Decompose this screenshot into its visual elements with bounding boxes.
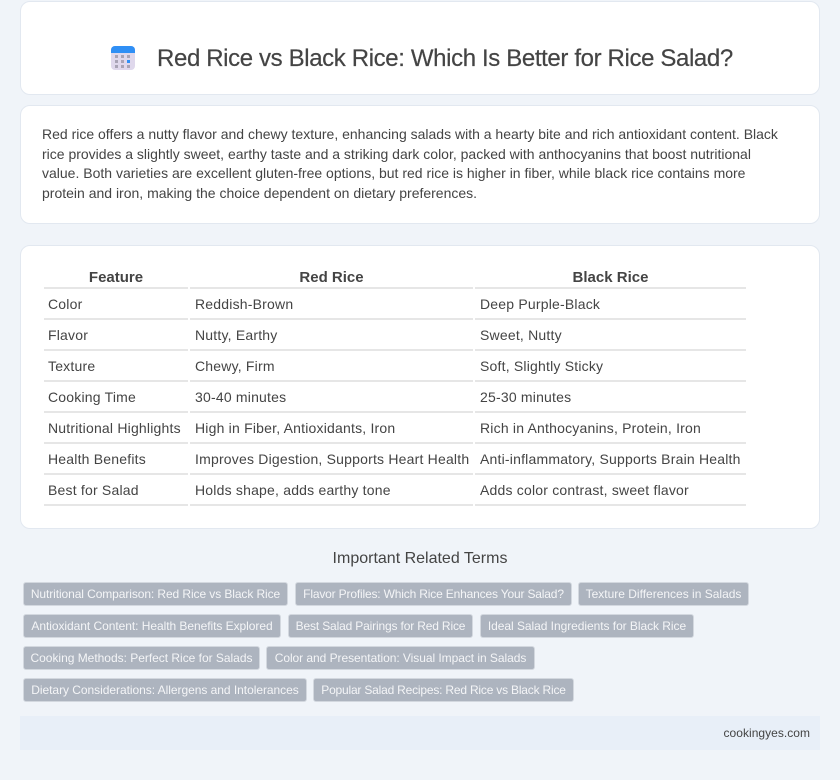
text: Deep Purple-Black [480, 296, 600, 312]
intro text: value. Both varieties are excellent gluten-free options, but red rice is higher in fiber, while black rice contains more [42, 165, 745, 181]
text: Health Benefits [48, 451, 146, 467]
related term tags: Ideal Salad Ingredients for Black Rice [488, 619, 686, 633]
text: Chewy, Firm [195, 358, 275, 374]
related term tags: Dietary Considerations: Allergens and Intolerances [31, 683, 299, 697]
related term tags: Cooking Methods: Perfect Rice for Salads [30, 651, 252, 665]
header panel [20, 1, 820, 95]
header: Black Rice: Black Rice [573, 269, 648, 286]
related term tags: Nutritional Comparison: Red Rice vs Black Rice [31, 587, 280, 601]
text: Rich in Anthocyanins, Protein, Iron [480, 420, 701, 436]
text: Adds color contrast, sweet flavor [480, 482, 689, 498]
text: Color [48, 296, 82, 312]
header: Feature [44, 266, 188, 289]
text: Texture [48, 358, 95, 374]
header: Red Rice: Red Rice [299, 269, 364, 286]
text: Nutritional Highlights [48, 420, 181, 436]
intro text: Red rice offers a nutty flavor and chewy texture, enhancing salads with a hearty bite and rich antioxidant content. Black [42, 126, 778, 142]
header: Feature: Feature [89, 269, 143, 286]
panel: comparison table [20, 245, 820, 529]
related term tags: Antioxidant Content: Health Benefits Explored [31, 619, 273, 633]
related term tags [23, 582, 749, 702]
icon: calendar [111, 46, 135, 70]
header: Black Rice [475, 266, 746, 289]
related term tags: Color and Presentation: Visual Impact in Salads [275, 651, 526, 665]
intro text: rice provides a slightly sweet, earthy taste and a striking dark color, packed with anthocyanins that boost nutritional [42, 146, 751, 162]
text: High in Fiber, Antioxidants, Iron [195, 420, 395, 436]
text: Improves Digestion, Supports Heart Health [195, 451, 469, 467]
header: Red Rice [190, 266, 473, 289]
text: Flavor [48, 327, 88, 343]
text: Anti-inflammatory, Supports Brain Health [480, 451, 741, 467]
intro text: protein and iron, making the choice dependent on dietary preferences. [42, 184, 477, 200]
text: Sweet, Nutty [480, 327, 562, 343]
intro text [42, 126, 778, 201]
footer source: cookingyes.com [724, 726, 810, 740]
text: Reddish-Brown [195, 296, 293, 312]
comparison table headers [44, 269, 746, 289]
panel: introduction [20, 105, 820, 224]
related term tags: Texture Differences in Salads [586, 587, 741, 601]
text: Nutty, Earthy [195, 327, 277, 343]
related terms heading: Important Related Terms [333, 550, 507, 567]
related term tags: Flavor Profiles: Which Rice Enhances Your Salad? [303, 587, 564, 601]
title: Red Rice vs Black Rice: Which Is Better for Rice Salad? [157, 45, 733, 72]
footer bar [20, 716, 820, 750]
text: Cooking Time [48, 389, 136, 405]
text: 25-30 minutes [480, 389, 571, 405]
text: Soft, Slightly Sticky [480, 358, 603, 374]
text: 30-40 minutes [195, 389, 286, 405]
related term tags: Best Salad Pairings for Red Rice [296, 619, 465, 633]
text: Best for Salad [48, 482, 139, 498]
related term tags: Popular Salad Recipes: Red Rice vs Black Rice [321, 683, 566, 697]
text: Holds shape, adds earthy tone [195, 482, 391, 498]
